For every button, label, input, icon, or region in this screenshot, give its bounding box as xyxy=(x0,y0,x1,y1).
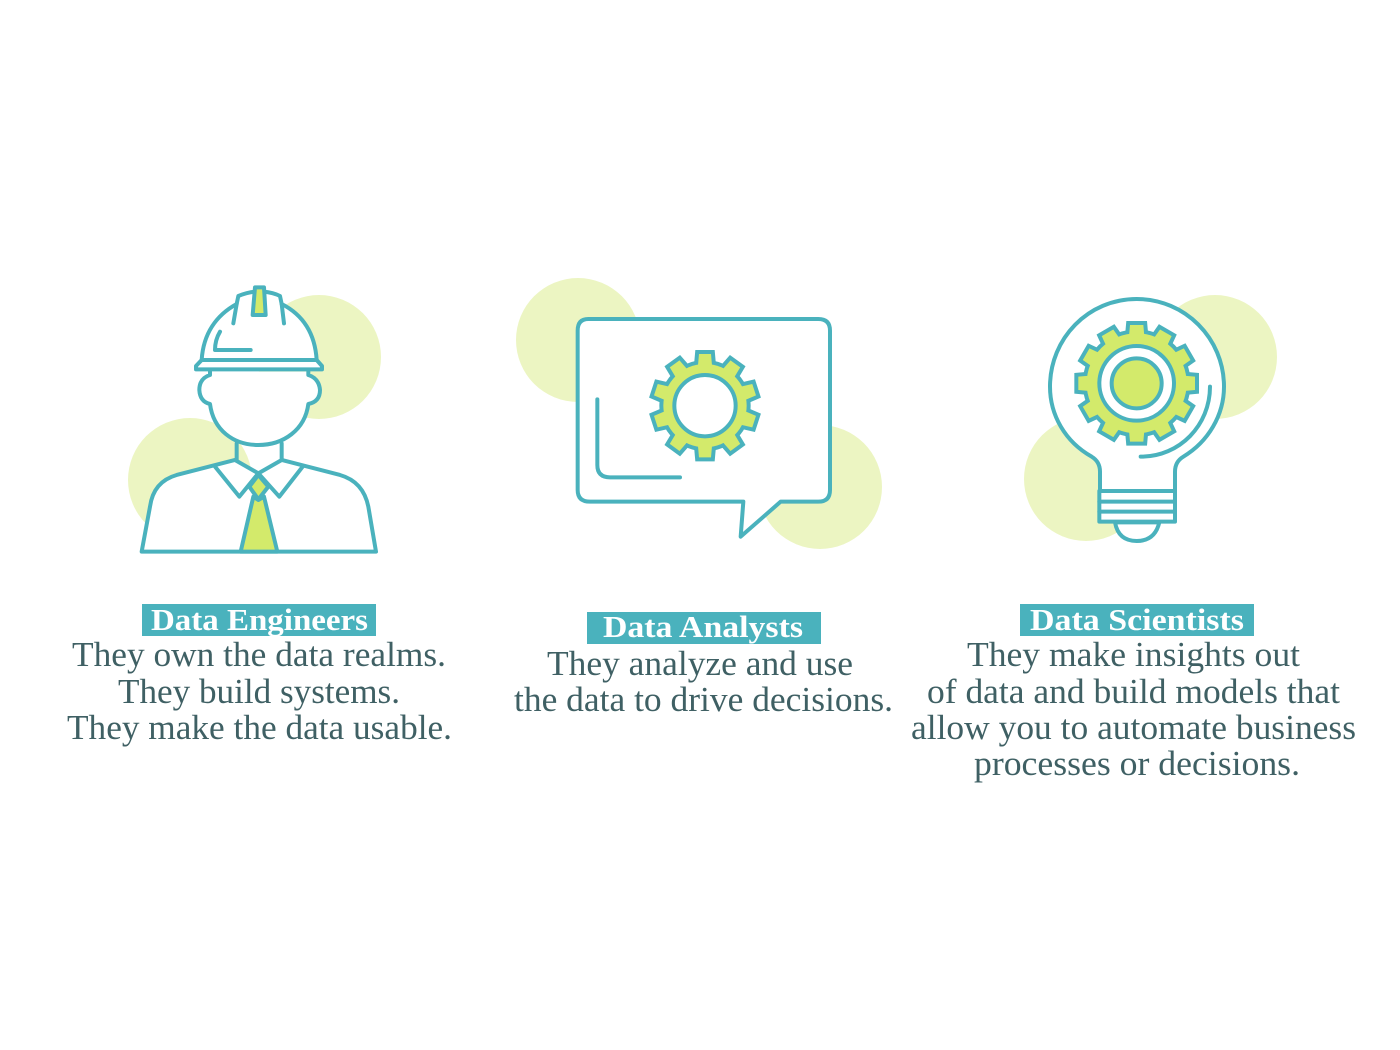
text: scientists description: They make insights out xyxy=(967,635,1300,674)
heading: Data Engineers: Data Engineers xyxy=(151,602,368,637)
text: engineers description: They own the data realms. xyxy=(72,635,446,674)
text: scientists description: allow you to automate business xyxy=(911,708,1356,747)
text: engineers description: They make the data usable. xyxy=(67,708,452,747)
text: engineers description: They build systems. xyxy=(118,672,400,711)
panel: data scientists xyxy=(911,295,1356,783)
text: scientists description xyxy=(911,635,1356,783)
icon: engineer in hard hat xyxy=(128,287,381,552)
text: scientists description: processes or decisions. xyxy=(974,744,1300,783)
heading: Data Scientists: Data Scientists xyxy=(1030,602,1244,637)
icon: light bulb with gear xyxy=(1024,295,1277,541)
panel: data analysts xyxy=(514,278,893,719)
text: engineers description xyxy=(67,635,452,747)
text: scientists description: of data and build models that xyxy=(927,672,1340,711)
text: analysts description: the data to drive decisions. xyxy=(514,680,893,719)
text: analysts description xyxy=(514,644,893,719)
heading: Data Analysts: Data Analysts xyxy=(603,609,803,644)
text: analysts description: They analyze and use xyxy=(547,644,853,683)
panel: data engineers xyxy=(67,287,452,747)
icon: speech bubble with gear xyxy=(516,278,882,549)
